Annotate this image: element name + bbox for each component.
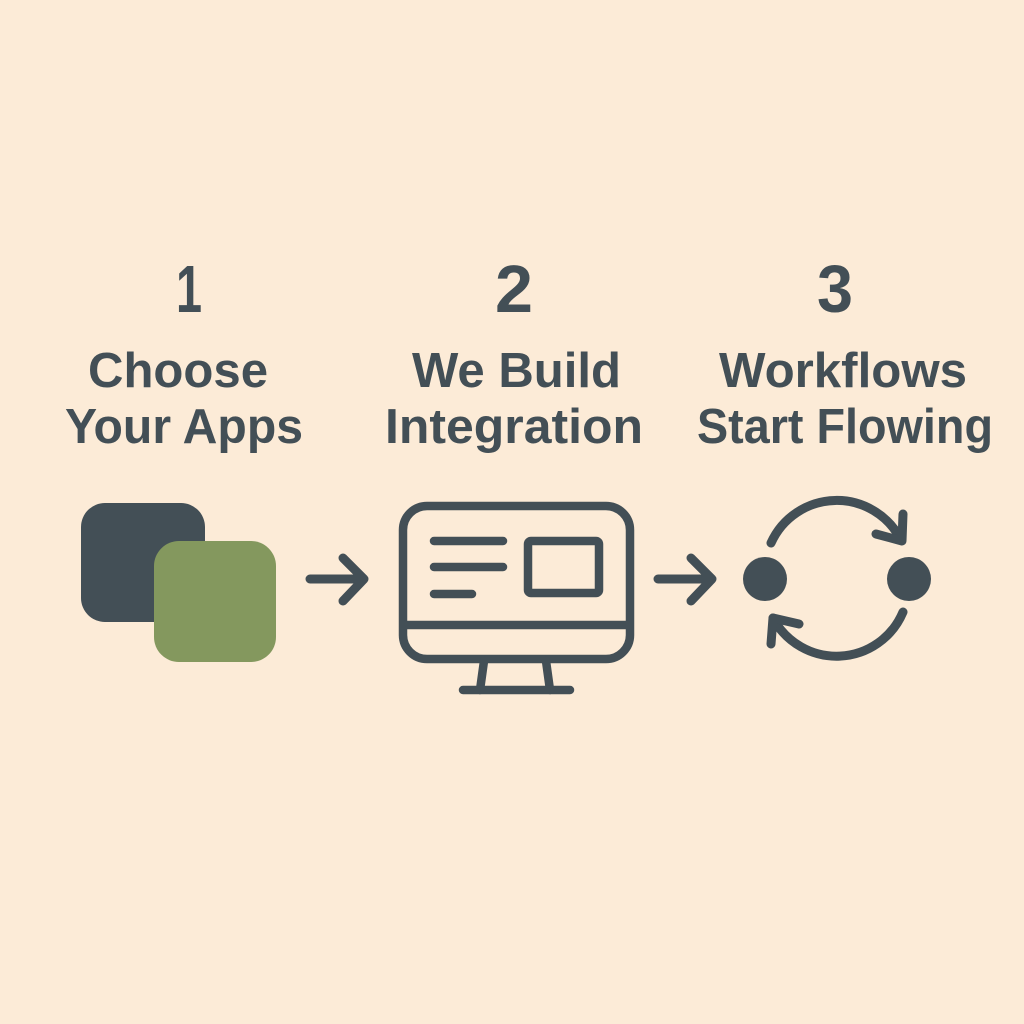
- arrow: step 1 to step 2: [310, 558, 364, 601]
- step 3 heading: Start Flowing: [697, 400, 993, 454]
- arrow: step 2 to step 3: [658, 558, 712, 601]
- step 2 heading: Integration: [385, 400, 643, 454]
- icon: overlapping app squares: [81, 503, 276, 662]
- step 3 heading: [697, 344, 993, 454]
- step 1 number: 1: [176, 252, 202, 327]
- step 3 heading: Workflows: [719, 344, 967, 398]
- step 2 heading: [385, 344, 643, 454]
- icon: desktop monitor: [403, 506, 630, 690]
- step 2 heading: We Build: [412, 344, 621, 398]
- step 1 heading: Choose: [88, 344, 268, 398]
- step 2 number: 2: [495, 252, 533, 327]
- icon: sync cycle: [743, 500, 931, 656]
- step 1: [65, 252, 303, 662]
- step 1 heading: Your Apps: [65, 400, 303, 454]
- step 3 number: 3: [817, 252, 853, 327]
- step 3: [697, 252, 993, 656]
- step 1 heading: [65, 344, 303, 454]
- step 2: [385, 252, 643, 690]
